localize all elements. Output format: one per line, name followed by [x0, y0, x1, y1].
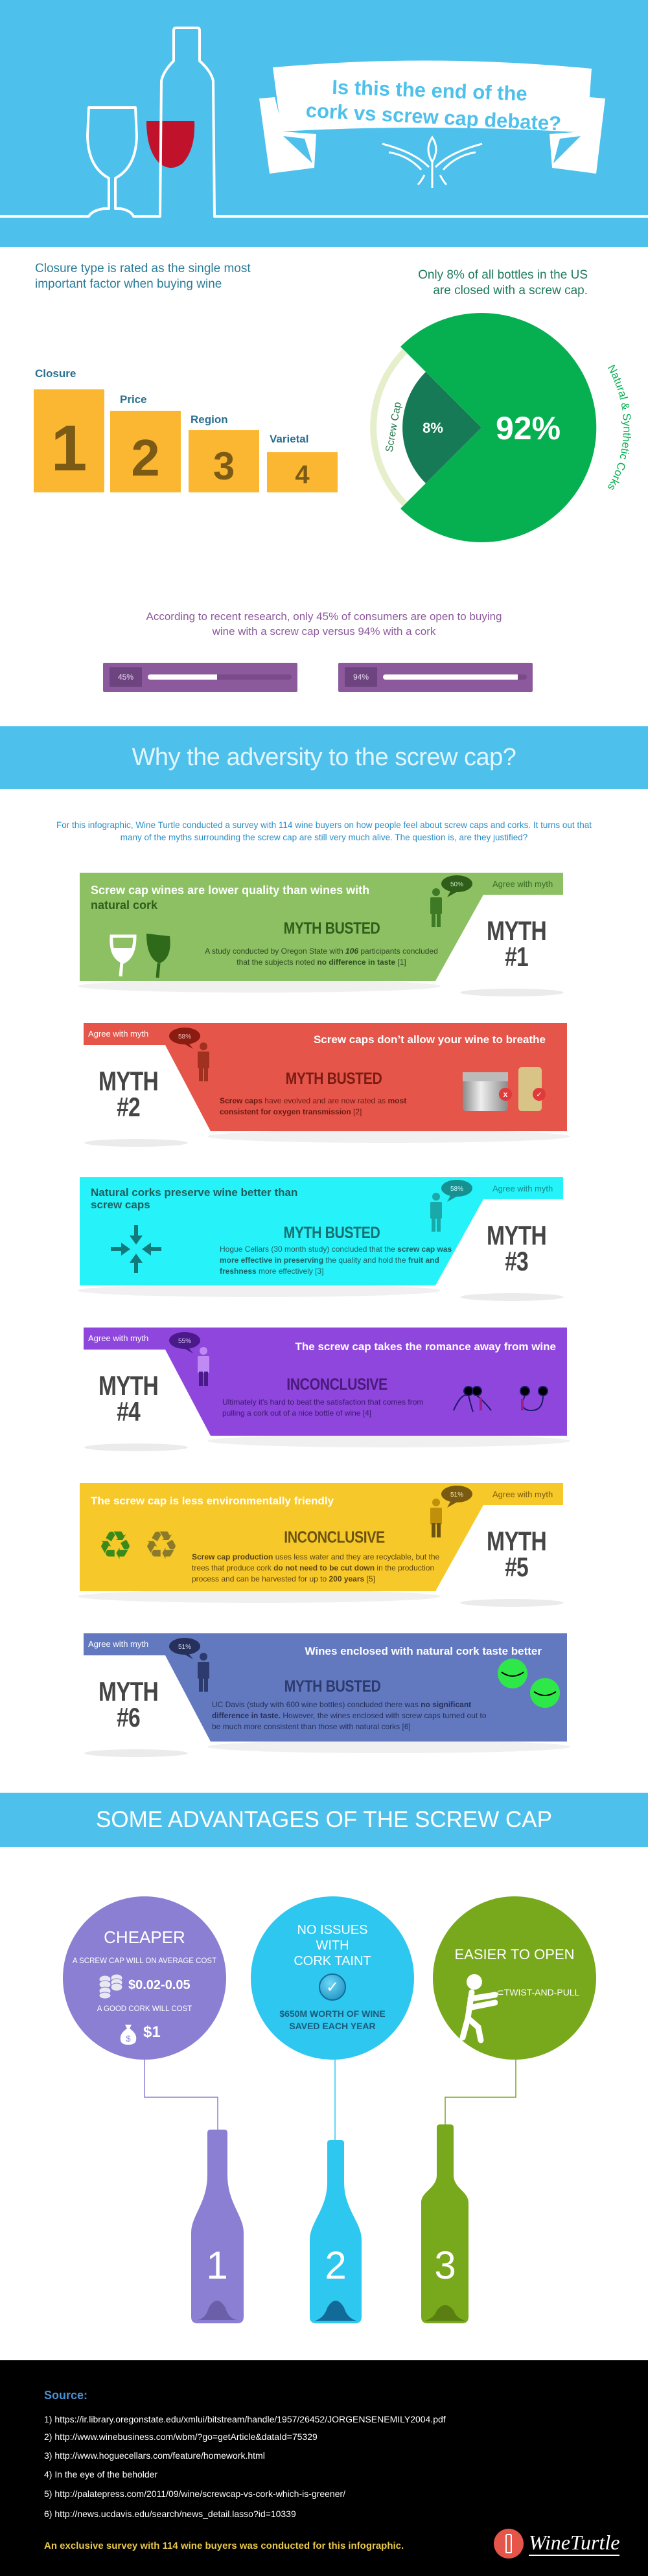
text: 45% vs 94%: wine with a screw cap versus 94% with a cork: [213, 625, 435, 638]
myth title: The screw cap is less environmentally friendly: [91, 1495, 334, 1507]
label: varietal: Varietal: [270, 433, 308, 445]
myth title: Wines enclosed with natural cork taste better: [305, 1645, 542, 1657]
header banner: [0, 0, 648, 247]
intro text: For this infographic, Wine Turtle conducted a survey with 114 wine buyers on how people feel about screw caps and corks. It turns out that many of the myths surrounding the screw cap are still very much alive. The question is, are they justified?: [56, 820, 592, 842]
circle: no cork taint: [251, 1896, 414, 2060]
myth number: #5: [505, 1552, 528, 1582]
icon: person with speech bubble: [169, 1332, 209, 1386]
icon: check mark: [319, 1973, 346, 2001]
myth title: The screw cap takes the romance away from wine: [295, 1340, 556, 1353]
body text: Ultimately it's hard to beat the satisfaction that comes from pulling a cork out of a nice bottle of wine [4]: [222, 1397, 423, 1418]
footer: sources: [0, 2360, 648, 2576]
icon: recycle symbols: ♻: [98, 1523, 133, 1569]
icon: person with speech bubble: [430, 875, 472, 927]
myth number: [98, 1676, 158, 1732]
verdict: MYTH BUSTED: [284, 919, 380, 937]
agree label: Agree with myth: [88, 1639, 148, 1649]
section heading: why the adversity: [0, 726, 648, 789]
icon: money bag and price: $: [126, 2034, 131, 2043]
source list: 4) In the eye of the beholder: [44, 2469, 157, 2479]
icon: screw cap vs cork: [463, 1067, 546, 1111]
agree label: Agree with myth: [492, 1489, 553, 1499]
text: closure importance: important factor when buying wine: [35, 277, 222, 291]
heading: NO ISSUES: [297, 1923, 367, 1937]
heading: [294, 1923, 371, 1968]
agree label: Agree with myth: [88, 1029, 148, 1039]
agree label: Agree with myth: [492, 879, 553, 889]
panel: myth 4: [84, 1328, 570, 1451]
myth number: MYTH: [487, 1220, 546, 1250]
panel: myth 1: [78, 873, 564, 996]
connector lines: [144, 2059, 516, 2140]
label: ⊂TWIST-AND-PULL: [496, 1987, 579, 1997]
myth number: #1: [505, 941, 528, 972]
myth title: Natural corks preserve wine better than screw caps: [91, 1186, 297, 1211]
text: 45% vs 94%: [146, 610, 502, 638]
pie chart: closure share: 8%: [422, 420, 443, 436]
myth number: #2: [117, 1092, 140, 1122]
source list: 1) https://ir.library.oregonstate.edu/xmlui/bitstream/handle/1957/26452/JORGENSENEMILY2004.pdf: [44, 2414, 446, 2424]
myth number: [487, 1220, 546, 1276]
body text: Screw cap production uses less water and they are recyclable, but the trees that produce cork do not need to be cut down in the production process and can be harvested for up to 200 years [5]: [192, 1552, 439, 1583]
heading: source: Source:: [44, 2389, 87, 2402]
icon: person with speech bubble: 50%: [450, 881, 463, 888]
label: region: Region: [191, 413, 228, 426]
myth number: MYTH: [487, 1526, 546, 1556]
icon: screw cap vs cork: x: [503, 1090, 508, 1099]
myth number: #6: [117, 1702, 140, 1732]
icon: wine glasses: [111, 934, 170, 978]
verdict: MYTH BUSTED: [284, 1677, 380, 1696]
icon: person pulling: [460, 1974, 498, 2043]
agree label: Agree with myth: [88, 1333, 148, 1343]
subtext: SAVED EACH YEAR: [289, 2021, 376, 2031]
source list: [44, 2414, 446, 2519]
icon: person with speech bubble: 51%: [450, 1491, 463, 1499]
icon: person with speech bubble: 58%: [450, 1186, 463, 1193]
myth number: MYTH: [98, 1370, 158, 1401]
progress bar: 94%: 94%: [353, 673, 369, 682]
body text: Screw caps have evolved and are now rated as most consistent for oxygen transmission [2]: [220, 1096, 406, 1116]
icon: wine glass and bottle outline: [0, 28, 648, 216]
myth number: MYTH: [487, 915, 546, 946]
title ribbon: [259, 60, 605, 188]
bar 3: [189, 430, 259, 492]
icon: recycle symbols: ♻: [144, 1523, 179, 1569]
icon: person with speech bubble: 51%: [178, 1644, 191, 1651]
verdict: INCONCLUSIVE: [286, 1375, 388, 1394]
panel: myth 2: [84, 1023, 570, 1147]
subtext: [279, 2008, 386, 2031]
icon: arrows pointing inward: [111, 1225, 161, 1273]
heading: CHEAPER: [104, 1927, 185, 1947]
icon: check mark: ✓: [326, 1978, 339, 1996]
text: 8% of bottles: Only 8% of all bottles in the US: [418, 268, 588, 282]
bottle 2: 2: [325, 2244, 347, 2287]
icon: romantic couples: [454, 1386, 548, 1412]
bottle 3: 3: [434, 2244, 456, 2287]
label: closure: Closure: [35, 367, 76, 380]
subtext cork cost: A GOOD CORK WILL COST: [97, 2005, 192, 2013]
source list: 2) http://www.winebusiness.com/wbm/?go=getArticle&dataId=75329: [44, 2432, 318, 2442]
myth number: #3: [505, 1246, 528, 1276]
verdict: MYTH BUSTED: [286, 1070, 382, 1088]
panel: myth 6: [84, 1633, 570, 1757]
heading: CORK TAINT: [294, 1954, 371, 1968]
circle: cheaper: [63, 1896, 226, 2060]
icon: person with speech bubble: [169, 1638, 209, 1692]
myth title: Screw caps don’t allow your wine to breathe: [314, 1033, 546, 1046]
verdict: MYTH BUSTED: [284, 1224, 380, 1242]
subtext: $650M WORTH OF WINE: [279, 2008, 386, 2019]
icon: screw cap vs cork: ✓: [536, 1090, 542, 1099]
body text: A study conducted by Oregon State with 106 participants concluded that the subjects noted no difference in taste [1]: [205, 947, 438, 967]
bottle 1: [191, 2130, 244, 2323]
subtext screw cap cost: A SCREW CAP WILL ON AVERAGE COST: [73, 1957, 216, 1965]
body text: UC Davis (study with 600 wine bottles) concluded there was no significant difference in taste. However, the wines enclosed with screw caps turned out to be much more consistent than those with natural corks [6]: [212, 1700, 487, 1731]
myth number: MYTH: [98, 1066, 158, 1096]
icon: coins and price: $0.02-0.05: [128, 1978, 191, 1992]
logo: WineTurtle: WineTurtle: [529, 2531, 619, 2554]
bar 2: [110, 411, 181, 492]
source list: 5) http://palatepress.com/2011/09/wine/screwcap-vs-cork-which-is-greener/: [44, 2489, 345, 2499]
agree label: Agree with myth: [492, 1184, 553, 1193]
icon: person with speech bubble: 55%: [178, 1338, 191, 1345]
pie chart: closure share: Natural & Synthetic Corks: [608, 364, 631, 490]
myth number: [487, 915, 546, 972]
myth number: [487, 1526, 546, 1582]
pie chart: closure share: Screw Cap: [384, 401, 404, 453]
icon: coins and price: [100, 1975, 191, 1998]
icon: smiley faces: [498, 1659, 560, 1708]
bar 1: [34, 389, 104, 492]
text: closure importance: [35, 262, 251, 291]
panel: myth 3: [78, 1177, 564, 1301]
icon: person with speech bubble: [430, 1180, 472, 1232]
pie chart: closure share: [370, 313, 631, 542]
text: closure importance: Closure type is rated as the single most: [35, 262, 251, 275]
progress bar: 45%: [103, 663, 297, 692]
section heading: why the adversity: Why the adversity to the screw cap?: [132, 744, 516, 771]
bar 2: 2: [131, 429, 160, 487]
section heading: advantages: SOME ADVANTAGES OF THE SCREW CAP: [96, 1807, 552, 1832]
circle: easier to open: [433, 1896, 596, 2060]
verdict: INCONCLUSIVE: [284, 1528, 385, 1547]
title text: cork vs screw cap debate?: [305, 99, 562, 135]
progress bar: 45%: 45%: [118, 673, 133, 682]
logo: WineTurtle: [494, 2529, 619, 2559]
bar 1: 1: [51, 412, 87, 485]
body text: Hogue Cellars (30 month study) concluded that the screw cap was more effective in preserving the quality and hold the fruit and freshness more effectively [3]: [220, 1245, 452, 1276]
bottle 3: [421, 2124, 469, 2323]
title text: [305, 76, 562, 135]
bar 4: 4: [295, 461, 310, 489]
text: 45% vs 94%: According to recent research, only 45% of consumers are open to buying: [146, 610, 502, 623]
myth number: [98, 1370, 158, 1427]
heading: WITH: [316, 1938, 349, 1953]
bottle 1: 1: [206, 2244, 228, 2287]
icon: person with speech bubble: [430, 1486, 472, 1537]
icon: money bag and price: $1: [143, 2023, 161, 2041]
text: 8% of bottles: [418, 268, 588, 297]
myth number: [98, 1066, 158, 1122]
icon: person with speech bubble: 58%: [178, 1033, 191, 1041]
source list: 6) http://news.ucdavis.edu/search/news_detail.lasso?id=10339: [44, 2509, 296, 2519]
label: price: Price: [120, 393, 147, 406]
section heading: advantages: [0, 1793, 648, 1847]
survey note: An exclusive survey with 114 wine buyers was conducted for this infographic.: [44, 2540, 404, 2551]
bar 3: 3: [213, 444, 235, 488]
bar 4: [267, 452, 338, 492]
pie chart: closure share: 92%: [496, 410, 561, 446]
icon: money bag and price: [121, 2023, 161, 2045]
icon: person with speech bubble: [169, 1028, 209, 1081]
bar chart: ranking of factors: [34, 367, 338, 492]
text: 8% of bottles: are closed with a screw cap.: [433, 284, 588, 297]
myth title: Screw cap wines are lower quality than wines with natural cork: [91, 884, 369, 912]
icon: recycle symbols: [98, 1523, 179, 1569]
progress bar: 94%: [338, 663, 533, 692]
myth number: MYTH: [98, 1676, 158, 1707]
panel: myth 5: [78, 1483, 564, 1607]
myth number: #4: [117, 1396, 140, 1427]
source list: 3) http://www.hoguecellars.com/feature/homework.html: [44, 2450, 265, 2461]
heading: EASIER TO OPEN: [454, 1946, 575, 1962]
bottle 2: [310, 2140, 362, 2323]
title text: Is this the end of the: [332, 76, 527, 105]
